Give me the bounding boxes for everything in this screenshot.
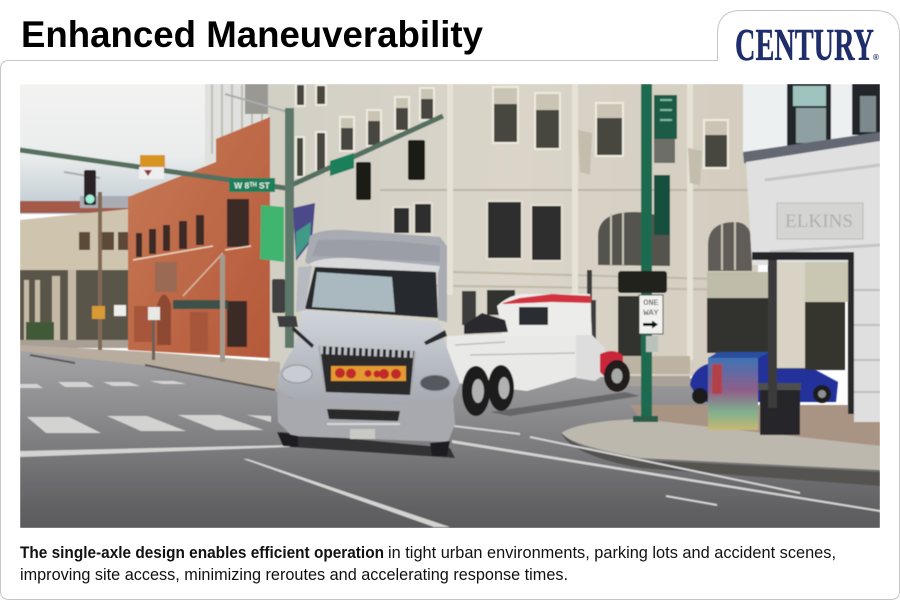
title: Enhanced Maneuverability: [21, 14, 483, 55]
painted utility box: [708, 352, 770, 430]
hood: [278, 310, 460, 408]
mirror: [272, 279, 285, 313]
red roof: [503, 294, 591, 304]
road: [20, 350, 880, 528]
carved ornaments: [578, 130, 702, 185]
signal poles and arms: [20, 84, 658, 422]
blue parked car: [690, 352, 838, 404]
windshield: [305, 267, 438, 318]
license plate: [350, 429, 375, 439]
grille: [319, 346, 415, 395]
photo: tow truck turning on a city street: [20, 84, 880, 528]
hood and fender: [576, 335, 608, 381]
amber light bar: [331, 366, 406, 381]
roof fairing: [305, 230, 447, 322]
brick building: [128, 117, 270, 358]
red building behind: [20, 196, 130, 213]
caption: improving site access, minimizing reroutes and accelerating response times.: [20, 566, 568, 584]
carved name: ELKINS: [785, 211, 853, 232]
small signs at left: [92, 255, 225, 362]
overhead warning sign: [139, 155, 165, 179]
pale tower behind: [205, 84, 275, 164]
arched windows: [598, 212, 752, 271]
wrecker boom equipment: [464, 313, 508, 334]
upper storey windows: [296, 84, 728, 177]
side compartments: [455, 342, 575, 355]
bumper: [277, 388, 455, 442]
crew cab: [497, 294, 592, 336]
caption: in tight urban environments, parking lots and accident scenes,: [388, 544, 836, 562]
second green street sign: [330, 153, 354, 176]
Elkins stone building: [743, 84, 880, 422]
window blinds: [341, 88, 727, 135]
rear wheels: [462, 366, 490, 416]
one way sign: WAY: [643, 308, 659, 318]
traffic signals: [84, 95, 677, 293]
left side cab: [296, 266, 312, 312]
road shadow: [280, 432, 455, 458]
silver semi truck front: [272, 230, 460, 458]
stone office building: [268, 84, 769, 376]
street name sign: W 8ᵀᴴ ST: [234, 180, 271, 190]
one way sign: ONE: [643, 298, 659, 308]
left sidewalk: [20, 345, 280, 392]
caption: The single-axle design enables efficient operation: [20, 544, 384, 562]
front tires: [277, 432, 450, 456]
city center banners: [260, 203, 315, 262]
tow truck body: [447, 331, 576, 391]
exhaust stacks and tow gear: [462, 270, 596, 340]
front wheel: [604, 360, 630, 392]
visor marker strip: [309, 258, 440, 273]
road markings: [20, 381, 880, 527]
middle storey windows: [393, 201, 562, 261]
right sidewalk and curb: [561, 376, 880, 486]
street name sign: [229, 178, 275, 192]
trash can: [758, 383, 801, 435]
sky: [20, 84, 210, 214]
tow truck: [447, 270, 640, 416]
ground floor dark openings: [487, 290, 769, 356]
street light: [64, 94, 288, 178]
headlights: [282, 365, 450, 391]
tan concrete building: [20, 209, 128, 348]
tow truck shadow: [490, 392, 640, 416]
one way sign: [639, 295, 663, 352]
logo: Century: ®: [873, 53, 879, 62]
